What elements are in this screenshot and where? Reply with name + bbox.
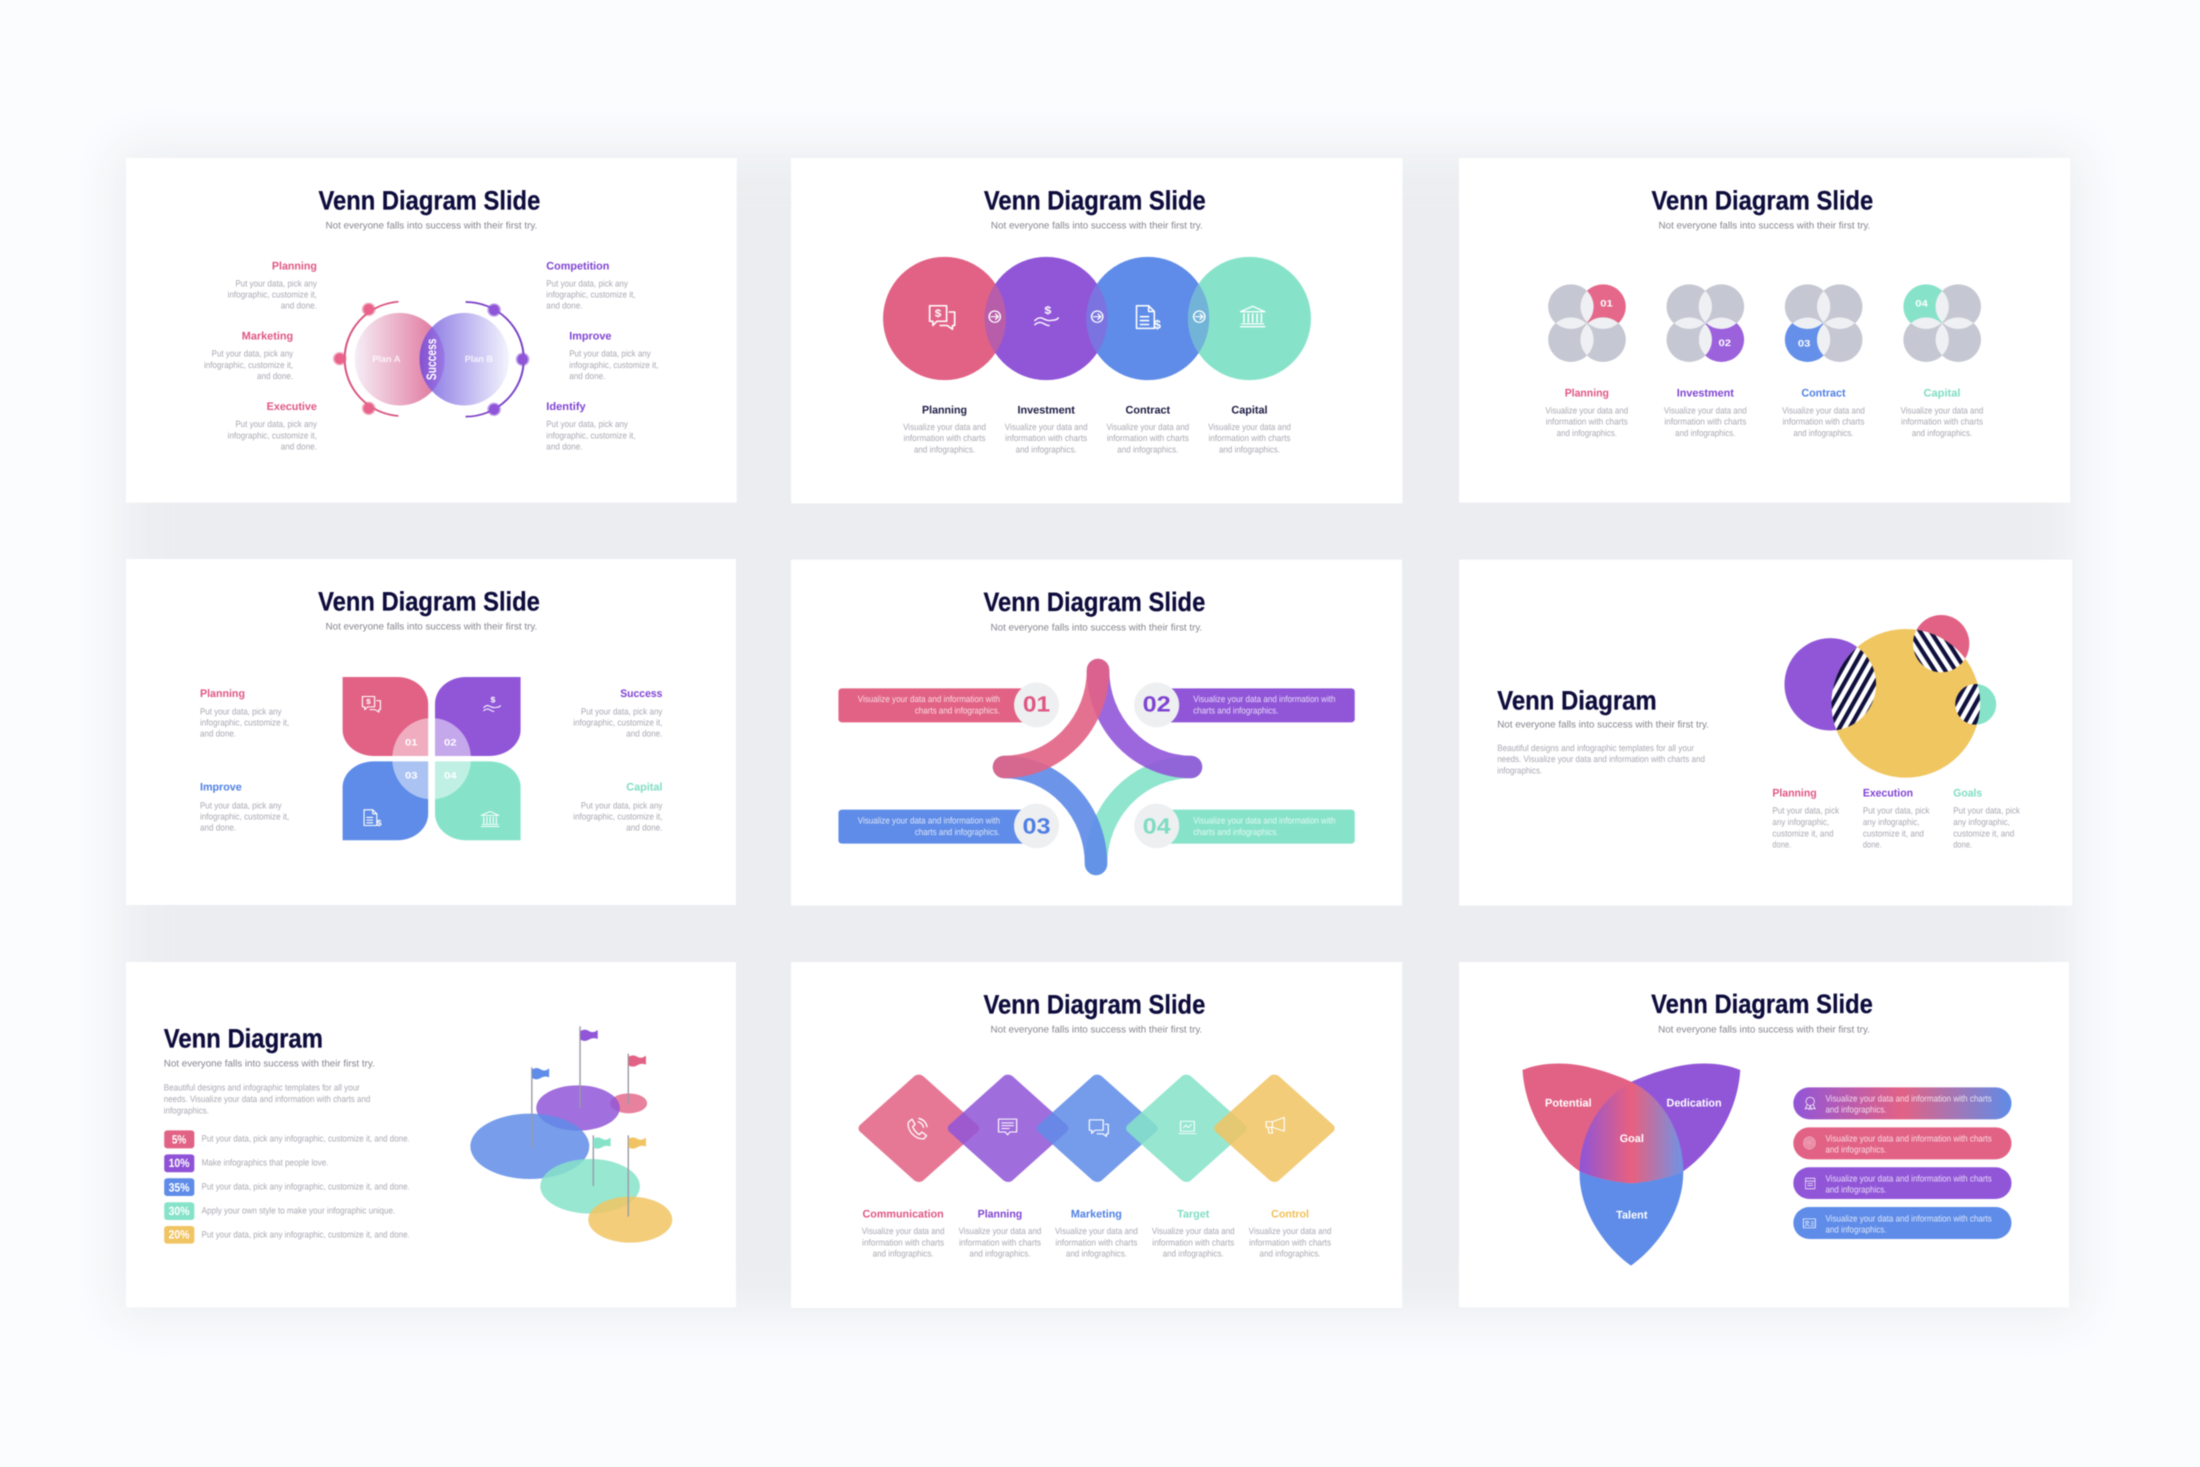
panel: four-point star with numbered bars bbox=[791, 560, 1402, 906]
star of four curved bands bbox=[1004, 670, 1191, 864]
label: capital: Visualize your data and bbox=[1208, 422, 1291, 432]
pill 2: and infographics. bbox=[1825, 1144, 1887, 1154]
text block: improve bbox=[569, 330, 658, 381]
icon: phone bbox=[908, 1118, 927, 1139]
pill 3: and infographics. bbox=[1825, 1184, 1887, 1194]
title: Venn Diagram bbox=[1497, 685, 1657, 715]
label: investment: Investment bbox=[1017, 403, 1075, 416]
title: Venn Diagram Slide bbox=[1651, 989, 1873, 1019]
bar 01: charts and infographics. bbox=[915, 705, 1000, 715]
text block: planning: any infographic, bbox=[1772, 817, 1829, 827]
text block: planning: customize it, and bbox=[1772, 828, 1833, 838]
text block: improve: and done. bbox=[569, 371, 605, 381]
three-leaf venn: Dedication bbox=[1667, 1096, 1722, 1109]
list row: 30% bbox=[164, 1202, 395, 1220]
venn diagram: plan A, plan B, success bbox=[355, 313, 509, 405]
icon: document with dollar: $ bbox=[1154, 317, 1161, 332]
label: communication bbox=[862, 1207, 945, 1259]
label: planning: Planning bbox=[978, 1207, 1022, 1220]
text block: improve bbox=[200, 781, 289, 833]
panel: diamond chain bbox=[791, 962, 1402, 1308]
list row: 20%: 20% bbox=[169, 1228, 190, 1241]
label: marketing bbox=[1055, 1207, 1138, 1259]
label: planning bbox=[1545, 387, 1628, 438]
description: infographics. bbox=[164, 1105, 209, 1115]
subtitle: Not everyone falls into success with their first try. bbox=[1659, 220, 1870, 231]
label: communication: information with charts bbox=[862, 1237, 944, 1247]
list row: 20% bbox=[164, 1226, 410, 1244]
list row: 10% bbox=[164, 1154, 329, 1172]
description: infographics. bbox=[1497, 765, 1542, 775]
number badge 03: 03 bbox=[1022, 813, 1051, 838]
subtitle: Not everyone falls into success with their first try. bbox=[991, 220, 1203, 231]
list row: 35% bbox=[164, 1178, 410, 1196]
label: capital: Capital bbox=[1231, 403, 1268, 416]
list row: 30%: 30% bbox=[169, 1204, 190, 1218]
text block: capital: infographic, customize it, bbox=[573, 811, 662, 821]
text block: planning bbox=[1772, 787, 1839, 850]
text block: competition bbox=[546, 259, 636, 311]
venn diagram: plan A, plan B, success: Success bbox=[424, 338, 439, 380]
label: investment: Visualize your data and bbox=[1664, 405, 1747, 415]
petals with center circle: 01 bbox=[405, 737, 418, 747]
three-leaf venn bbox=[1523, 1064, 1740, 1266]
title: Venn Diagram Slide bbox=[983, 989, 1205, 1019]
label: capital bbox=[1901, 387, 1983, 438]
label: communication: and infographics. bbox=[873, 1249, 934, 1259]
label: planning: and infographics. bbox=[1557, 428, 1617, 438]
icon: document with dollar bbox=[1137, 306, 1161, 332]
bar 02: Visualize your data and information with bbox=[1193, 694, 1335, 704]
text block: executive: Put your data, pick any bbox=[235, 419, 317, 429]
text block: capital: Put your data, pick any bbox=[581, 800, 663, 810]
subtitle: Not everyone falls into success with their first try. bbox=[326, 220, 537, 231]
text block: identify: and done. bbox=[546, 441, 582, 451]
subtitle: Not everyone falls into success with their first try. bbox=[164, 1058, 375, 1069]
title: Venn Diagram Slide bbox=[318, 586, 540, 616]
list row: 20%: Put your data, pick any infographic, customize it, and done. bbox=[202, 1229, 410, 1239]
label: communication: Visualize your data and bbox=[862, 1226, 945, 1236]
arc with dots: purple bbox=[466, 302, 529, 417]
venn circles with striped intersections bbox=[1784, 615, 1996, 778]
icon: hand with dollar: $ bbox=[1044, 304, 1051, 316]
label: investment: information with charts bbox=[1664, 417, 1746, 427]
text block: execution: done. bbox=[1863, 840, 1882, 850]
panel: four linked circles bbox=[791, 158, 1403, 503]
number badge 01 bbox=[1014, 683, 1059, 727]
text block: success bbox=[573, 687, 663, 739]
label: contract bbox=[1106, 403, 1189, 454]
icon: chart on laptop bbox=[1179, 1121, 1196, 1134]
text block: executive: infographic, customize it, bbox=[228, 430, 317, 440]
diamonds bbox=[865, 1080, 1328, 1177]
text block: execution: any infographic, bbox=[1863, 817, 1919, 827]
text block: planning: infographic, customize it, bbox=[228, 290, 317, 300]
label: planning: information with charts bbox=[904, 433, 985, 443]
petals with center circle: 04 bbox=[444, 770, 457, 780]
subtitle: Not everyone falls into success with their first try. bbox=[1497, 719, 1709, 730]
text block: competition: and done. bbox=[546, 301, 582, 311]
label: planning: and infographics. bbox=[914, 444, 975, 454]
description: Beautiful designs and infographic templates for all your bbox=[1497, 743, 1694, 753]
label: target: Visualize your data and bbox=[1152, 1226, 1235, 1236]
panel: flags on overlapping ellipses bbox=[126, 962, 736, 1307]
number badge 04 bbox=[1134, 804, 1179, 848]
label: contract: information with charts bbox=[1107, 433, 1189, 443]
label: contract: and infographics. bbox=[1117, 444, 1178, 454]
label: planning: Planning bbox=[1565, 387, 1609, 399]
text block: marketing bbox=[204, 330, 293, 381]
label: capital bbox=[1208, 403, 1291, 454]
list row: 10%: 10% bbox=[169, 1156, 190, 1170]
subtitle: Not everyone falls into success with their first try. bbox=[991, 1024, 1202, 1035]
icon: chat with dollar: $ bbox=[935, 307, 941, 319]
text block: planning: Planning bbox=[200, 687, 245, 699]
number badge 02 bbox=[1134, 683, 1179, 727]
text block: marketing: Marketing bbox=[242, 330, 293, 342]
icon: document with dollar: $ bbox=[376, 818, 382, 828]
number badge 01: 01 bbox=[1023, 692, 1050, 716]
pill 4: and infographics. bbox=[1825, 1224, 1887, 1234]
text block: competition: Put your data, pick any bbox=[546, 278, 628, 288]
text block: success: Put your data, pick any bbox=[581, 706, 663, 716]
number badge 02: 02 bbox=[1143, 692, 1171, 716]
pill 1: Visualize your data and information with charts bbox=[1825, 1093, 1992, 1103]
icon: bank bbox=[481, 811, 499, 826]
text block: identify: infographic, customize it, bbox=[546, 430, 636, 440]
list row: 35%: Put your data, pick any infographic, customize it, and done. bbox=[202, 1181, 410, 1191]
label: contract: and infographics. bbox=[1793, 428, 1854, 438]
icon: chat with dollar bbox=[930, 306, 955, 329]
icon: hand with dollar bbox=[1035, 304, 1058, 326]
label: planning: Visualize your data and bbox=[903, 422, 986, 432]
flag: green bbox=[593, 1135, 611, 1186]
label: investment: information with charts bbox=[1005, 433, 1087, 443]
flag: blue bbox=[532, 1067, 549, 1149]
label: planning: information with charts bbox=[1546, 417, 1628, 427]
label: control: information with charts bbox=[1249, 1237, 1331, 1247]
label: capital: information with charts bbox=[1208, 433, 1290, 443]
petal diagram 01 bbox=[1548, 284, 1626, 362]
text block: identify: Identify bbox=[546, 400, 586, 412]
venn diagram: plan A, plan B, success: Plan B bbox=[465, 354, 493, 364]
text block: planning: Planning bbox=[272, 259, 317, 272]
label: communication: Communication bbox=[863, 1207, 944, 1220]
label: control bbox=[1249, 1207, 1331, 1259]
label: capital: information with charts bbox=[1901, 417, 1983, 427]
label: investment: Visualize your data and bbox=[1005, 422, 1088, 432]
three-leaf venn: Potential bbox=[1545, 1096, 1592, 1109]
text block: planning: done. bbox=[1772, 840, 1791, 850]
pill 3: Visualize your data and information with charts bbox=[1825, 1173, 1992, 1183]
bar 02 bbox=[1162, 688, 1355, 722]
bar 03: charts and infographics. bbox=[915, 827, 1000, 837]
label: contract: Contract bbox=[1126, 403, 1170, 416]
label: control: and infographics. bbox=[1260, 1249, 1321, 1259]
text block: marketing: infographic, customize it, bbox=[204, 360, 293, 370]
icon: bank bbox=[1241, 306, 1265, 327]
text block: success: and done. bbox=[626, 729, 662, 739]
title: Venn Diagram Slide bbox=[1651, 185, 1873, 215]
text block: competition: Competition bbox=[546, 259, 609, 272]
label: investment: and infographics. bbox=[1016, 444, 1077, 454]
text block: success: infographic, customize it, bbox=[573, 717, 662, 727]
overlapping ellipses bbox=[470, 1085, 672, 1243]
label: target: information with charts bbox=[1152, 1237, 1234, 1247]
label: investment bbox=[1005, 403, 1088, 454]
arrow: investment to contract bbox=[1092, 311, 1103, 322]
petal diagram 02: 02 bbox=[1719, 338, 1731, 348]
text block: executive: Executive bbox=[267, 400, 317, 412]
label: contract: Visualize your data and bbox=[1782, 405, 1865, 415]
bar 03: Visualize your data and information with bbox=[858, 816, 1000, 826]
text block: executive: and done. bbox=[281, 441, 317, 451]
text block: goals: any infographic, bbox=[1953, 817, 2010, 827]
label: planning: Planning bbox=[922, 403, 967, 416]
panel: three-leaf venn with pills bbox=[1459, 962, 2069, 1307]
text block: improve: and done. bbox=[200, 823, 236, 833]
text block: competition: infographic, customize it, bbox=[546, 290, 636, 300]
icon: megaphone bbox=[1266, 1117, 1284, 1133]
flag: purple bbox=[580, 1026, 598, 1108]
text block: planning: and done. bbox=[281, 301, 317, 311]
icon: double chat bubbles bbox=[1089, 1120, 1108, 1136]
label: capital: and infographics. bbox=[1219, 444, 1280, 454]
label: marketing: information with charts bbox=[1055, 1237, 1137, 1247]
bar 04: Visualize your data and information with bbox=[1193, 816, 1335, 826]
label: marketing: Marketing bbox=[1071, 1207, 1122, 1220]
text block: improve: infographic, customize it, bbox=[200, 811, 289, 821]
label: planning bbox=[959, 1207, 1041, 1259]
text block: planning: Put your data, pick any bbox=[235, 278, 317, 288]
text block: executive bbox=[228, 400, 317, 451]
three-leaf venn: Talent bbox=[1616, 1208, 1647, 1221]
label: capital: Capital bbox=[1923, 387, 1960, 399]
text block: marketing: and done. bbox=[257, 371, 293, 381]
text block: planning: Planning bbox=[1772, 787, 1817, 799]
flag: pink bbox=[628, 1054, 646, 1105]
list row: 5%: 5% bbox=[172, 1132, 186, 1146]
label: contract: information with charts bbox=[1782, 417, 1864, 427]
text block: planning: and done. bbox=[200, 729, 236, 739]
text block: execution: customize it, and bbox=[1863, 828, 1924, 838]
text block: marketing: Put your data, pick any bbox=[212, 349, 293, 359]
label: investment: Investment bbox=[1677, 387, 1734, 399]
label: target bbox=[1152, 1207, 1235, 1259]
panel: two-circle venn with plan A and plan B bbox=[126, 158, 737, 503]
text block: improve: Improve bbox=[200, 781, 242, 793]
icon: hand with dollar: $ bbox=[490, 695, 495, 704]
icon: hand with dollar bbox=[484, 695, 500, 711]
label: planning bbox=[903, 403, 986, 454]
text block: improve: Put your data, pick any bbox=[569, 349, 651, 359]
text block: goals: done. bbox=[1953, 840, 1972, 850]
label: capital: and infographics. bbox=[1912, 428, 1972, 438]
pill 1 bbox=[1793, 1087, 2011, 1119]
text block: execution: Put your data, pick bbox=[1863, 806, 1930, 816]
text block: planning: Put your data, pick any bbox=[200, 706, 282, 716]
text block: improve: Improve bbox=[569, 330, 611, 342]
bar 01 bbox=[838, 688, 1031, 722]
subtitle: Not everyone falls into success with their first try. bbox=[326, 621, 537, 632]
text block: planning: Put your data, pick bbox=[1772, 806, 1839, 816]
panel: four petal quadrant venn bbox=[126, 559, 736, 905]
bar 03 bbox=[838, 810, 1031, 844]
text block: success: Success bbox=[620, 687, 662, 699]
title: Venn Diagram Slide bbox=[983, 587, 1205, 617]
list row: 30%: Apply your own style to make your infographic unique. bbox=[202, 1205, 395, 1215]
label: planning: and infographics. bbox=[969, 1249, 1030, 1259]
bar 04 bbox=[1162, 810, 1355, 844]
petal diagram 02 bbox=[1667, 284, 1744, 362]
arrow: contract to capital bbox=[1194, 311, 1205, 322]
label: target: Target bbox=[1177, 1207, 1209, 1220]
pill 4 bbox=[1793, 1207, 2011, 1239]
petal diagram 03 bbox=[1785, 284, 1862, 362]
list row: 35%: 35% bbox=[169, 1180, 190, 1194]
label: marketing: Visualize your data and bbox=[1055, 1226, 1138, 1236]
arc with dots: pink bbox=[333, 302, 398, 416]
text block: improve: infographic, customize it, bbox=[569, 360, 658, 370]
title: Venn Diagram Slide bbox=[318, 185, 540, 215]
text block: execution bbox=[1863, 787, 1930, 850]
panel: large circle with striped overlaps bbox=[1459, 560, 2072, 906]
text block: goals: Goals bbox=[1953, 787, 1982, 799]
text block: capital: Capital bbox=[626, 781, 662, 793]
panel: four small petal diagrams bbox=[1459, 158, 2070, 503]
icon: chat with dollar: $ bbox=[366, 697, 371, 706]
label: contract: Contract bbox=[1801, 387, 1846, 399]
text block: improve: Put your data, pick any bbox=[200, 800, 282, 810]
label: target: and infographics. bbox=[1163, 1249, 1224, 1259]
pill 2: Visualize your data and information with charts bbox=[1825, 1133, 1992, 1143]
subtitle: Not everyone falls into success with their first try. bbox=[1658, 1024, 1870, 1035]
three-leaf venn: Goal bbox=[1620, 1132, 1644, 1144]
pill 1: and infographics. bbox=[1825, 1104, 1887, 1114]
subtitle: Not everyone falls into success with their first try. bbox=[991, 622, 1202, 633]
text block: goals: Put your data, pick bbox=[1953, 806, 2020, 816]
arrow: planning to investment bbox=[989, 311, 1000, 322]
description bbox=[1497, 743, 1705, 775]
petals with center circle: 02 bbox=[444, 737, 457, 747]
text block: goals: customize it, and bbox=[1953, 828, 2014, 838]
number badge 03 bbox=[1014, 804, 1059, 848]
label: planning: Visualize your data and bbox=[1545, 405, 1628, 415]
label: investment bbox=[1664, 387, 1747, 438]
list row: 5%: Put your data, pick any infographic, customize it, and done. bbox=[202, 1133, 410, 1143]
text block: capital bbox=[573, 781, 663, 833]
label: planning: information with charts bbox=[959, 1237, 1041, 1247]
text block: planning: infographic, customize it, bbox=[200, 717, 289, 727]
pill 4: Visualize your data and information with charts bbox=[1825, 1213, 1992, 1223]
petal diagram 04 bbox=[1903, 284, 1981, 362]
petal diagram 04: 04 bbox=[1915, 298, 1928, 309]
text block: planning bbox=[200, 687, 289, 739]
icon: chat with dollar bbox=[362, 696, 380, 712]
bar 04: charts and infographics. bbox=[1193, 827, 1278, 837]
title: Venn Diagram Slide bbox=[984, 185, 1206, 215]
list row: 5% bbox=[164, 1130, 410, 1148]
petal diagram 01: 01 bbox=[1600, 298, 1613, 309]
description: needs. Visualize your data and information with charts and bbox=[164, 1094, 370, 1104]
title: Venn Diagram bbox=[164, 1023, 323, 1053]
text block: capital: and done. bbox=[626, 823, 662, 833]
pill 3 bbox=[1793, 1167, 2011, 1199]
bar 02: charts and infographics. bbox=[1193, 705, 1278, 715]
label: planning: Visualize your data and bbox=[959, 1226, 1041, 1236]
bar 01: Visualize your data and information with bbox=[858, 694, 1000, 704]
number badge 04: 04 bbox=[1143, 813, 1171, 838]
label: contract: Visualize your data and bbox=[1106, 422, 1189, 432]
icon: message with lines bbox=[999, 1119, 1017, 1135]
circle chain bbox=[883, 257, 1311, 380]
description: Beautiful designs and infographic templates for all your bbox=[164, 1083, 360, 1093]
label: marketing: and infographics. bbox=[1066, 1249, 1127, 1259]
text block: identify: Put your data, pick any bbox=[546, 419, 628, 429]
label: control: Visualize your data and bbox=[1249, 1226, 1331, 1236]
pill 2 bbox=[1793, 1127, 2011, 1159]
label: capital: Visualize your data and bbox=[1901, 405, 1983, 415]
list row: 10%: Make infographics that people love. bbox=[202, 1157, 329, 1167]
label: investment: and infographics. bbox=[1675, 428, 1735, 438]
description: needs. Visualize your data and information with charts and bbox=[1497, 754, 1705, 764]
flag: yellow bbox=[628, 1135, 646, 1217]
label: control: Control bbox=[1271, 1207, 1309, 1220]
label: contract bbox=[1782, 387, 1865, 438]
text block: identify bbox=[546, 400, 636, 451]
icon: document with dollar bbox=[364, 810, 382, 828]
petal diagram 03: 03 bbox=[1798, 338, 1810, 348]
petals with center circle bbox=[343, 677, 521, 840]
venn diagram: plan A, plan B, success: Plan A bbox=[372, 354, 400, 364]
text block: goals bbox=[1953, 787, 2020, 850]
description bbox=[164, 1083, 370, 1115]
petals with center circle: 03 bbox=[405, 770, 418, 780]
text block: execution: Execution bbox=[1863, 787, 1913, 799]
text block: planning bbox=[228, 259, 317, 311]
